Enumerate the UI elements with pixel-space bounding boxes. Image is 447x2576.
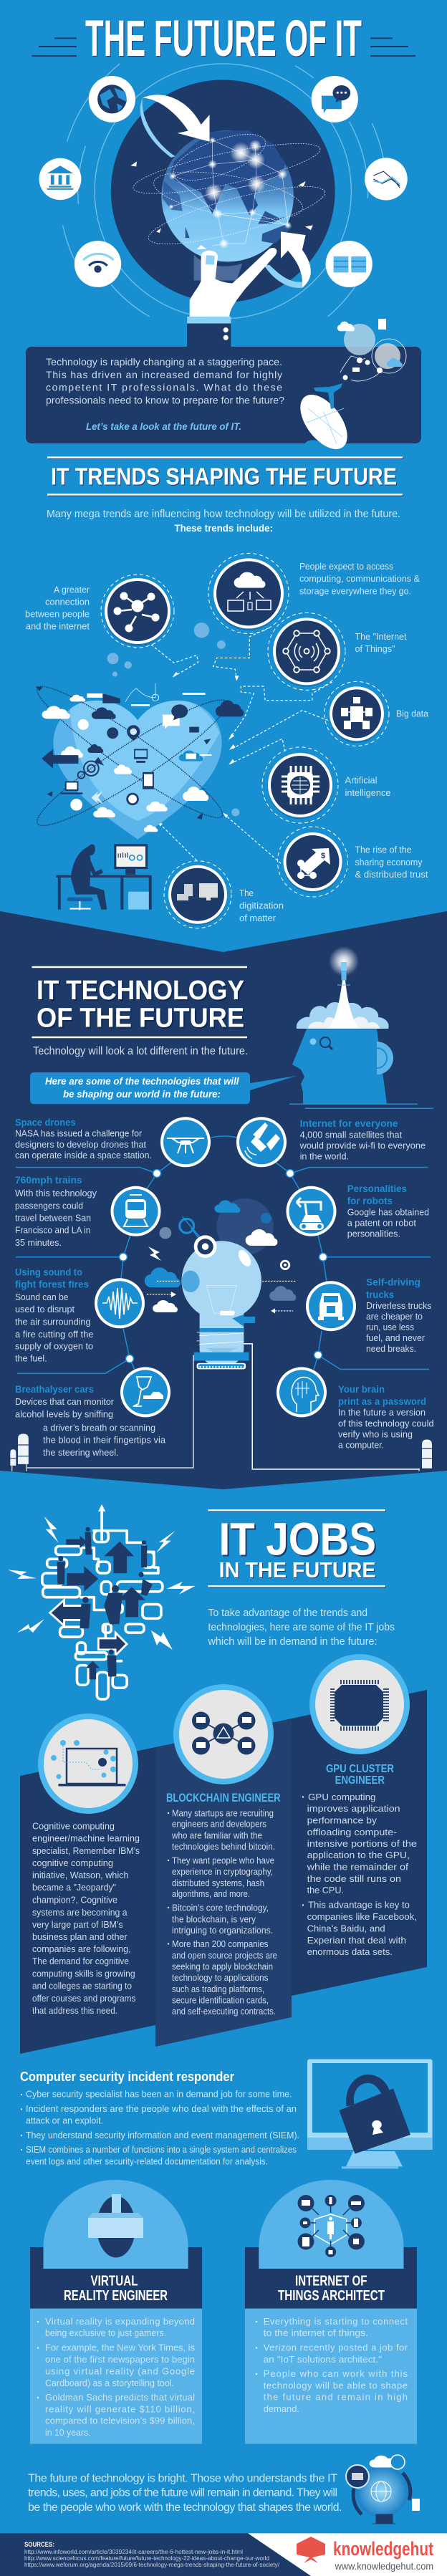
job: cognitive computing: that address this need. <box>32 2005 117 2016</box>
bulb base and wires <box>10 1332 432 1471</box>
job: blockchain engineer: and open source projects are <box>172 1950 277 1961</box>
job: gpu cluster engineer: improves application <box>307 1803 400 1814</box>
icon: satellite <box>236 1117 287 1167</box>
section 2 intro <box>47 508 400 534</box>
curved arrows <box>140 95 311 288</box>
intro text: competent IT professionals. What do these <box>46 382 282 393</box>
job: cognitive computing: companies are following, <box>32 1943 131 1954</box>
technology: self-driving trucks: need breaks. <box>366 1343 416 1354</box>
trend: sharing economy label: & distributed trust <box>355 869 428 880</box>
illustration: head with rocket <box>289 946 433 1108</box>
job: cognitive computing: champion?, Cognitive <box>32 1895 117 1905</box>
technology: breathalyser cars: a driver’s breath or scanning <box>43 1423 155 1433</box>
section 2 heading <box>47 458 403 494</box>
section 3 subtitle: Technology will look a lot different in the future. <box>33 1045 248 1057</box>
trend: digitization circle <box>164 861 231 928</box>
job: gpu cluster engineer: the CPU. <box>307 1885 344 1895</box>
navy clouds and icons <box>42 693 244 805</box>
technology: breathalyser cars: the blood in their fingertips via <box>43 1435 166 1446</box>
job: gpu cluster engineer: Experian that deal with <box>307 1935 406 1946</box>
card: virtual reality engineer <box>30 2180 202 2444</box>
technology: 760mph trains: 760mph trains <box>15 1174 82 1186</box>
icon: chat <box>312 76 358 122</box>
technology: personalities for robots <box>347 1183 429 1239</box>
white clouds <box>42 693 208 832</box>
job: cognitive computing: and colleges ae starting to <box>32 1981 132 1991</box>
card: virtual reality engineer: Goldman Sachs predicts that virtual <box>45 2392 195 2403</box>
job: blockchain engineer: distributed systems, hash <box>172 1878 264 1888</box>
job: gpu cluster engineer: intensive portions of the <box>307 1838 417 1849</box>
footer: logo area <box>248 2533 447 2576</box>
section 3 heading: OF THE FUTURE <box>37 1004 244 1034</box>
trend: sharing economy label: The rise of the <box>355 845 411 855</box>
job: computer security incident responder: event logs and other security-related documentation for analysis. <box>26 2156 268 2167</box>
illustration: maze with people and arrows <box>8 1504 196 1699</box>
speech bubble <box>30 1072 297 1104</box>
job: cognitive computing: specialist, Remember IBM’s <box>32 1845 140 1856</box>
job: cognitive computing: computing skills is growing <box>32 1969 135 1979</box>
technology: brain print password: verify who is using <box>338 1428 413 1439</box>
hero illustration: hand holding globe <box>39 64 408 349</box>
connector nodes <box>119 1169 327 1363</box>
trend: big data label: Big data <box>396 708 429 719</box>
technology: using sound to fight forest fires: Using sound to <box>15 1267 82 1278</box>
trend: digitization label: The <box>239 888 254 898</box>
card: virtual reality engineer: REALITY ENGINEER <box>64 2288 168 2304</box>
closing statement: The future of technology is bright. Those who understands the IT <box>28 2473 337 2484</box>
job: cognitive computing <box>32 1821 140 2016</box>
job: gpu cluster engineer: the code still runs on <box>307 1873 401 1884</box>
logo mark <box>297 2537 325 2563</box>
footer: sources <box>0 2533 311 2576</box>
section 4 intro: To take advantage of the trends and <box>208 1607 367 1619</box>
card: internet of things architect: an "IoT solutions architect." <box>264 2354 382 2365</box>
icon: drone <box>160 1117 211 1167</box>
job: blockchain engineer: experience in cryptography, <box>172 1866 273 1877</box>
technology: internet for everyone: 4,000 small satellites that <box>300 1129 402 1140</box>
card: virtual reality engineer: reality will generate $110 billion, <box>45 2403 195 2414</box>
technology: breathalyser cars <box>15 1383 166 1458</box>
technology: self-driving trucks: Self-driving <box>366 1276 420 1287</box>
job: gpu cluster engineer: China’s Baidu, and <box>307 1923 385 1933</box>
technology: self-driving trucks: run, use less <box>366 1322 414 1332</box>
globe <box>161 130 294 261</box>
technology: breathalyser cars: Breathalyser cars <box>15 1383 94 1395</box>
job: gpu cluster engineer: while the remainder of <box>306 1862 408 1873</box>
card: virtual reality engineer: being exclusive to just gamers. <box>45 2327 166 2338</box>
technology: brain print password: Your brain <box>338 1383 385 1395</box>
illustration: satellite dish and technology icons <box>291 319 406 458</box>
panel: job cards background <box>20 1690 427 2054</box>
technology: personalities for robots: for robots <box>347 1195 393 1206</box>
job: computer security incident responder: Computer security incident responder <box>20 2070 234 2084</box>
card: internet of things architect: Verizon recently posted a job for <box>264 2342 408 2352</box>
technology: internet for everyone: would provide wi-fi to everyone <box>299 1140 426 1150</box>
card: internet of things architect: INTERNET OF <box>295 2274 367 2289</box>
job: blockchain engineer: technologies behind bitcoin. <box>172 1841 275 1852</box>
technology: personalities for robots: personalities. <box>347 1228 400 1239</box>
card: internet of things architect: THINGS ARCHITECT <box>278 2288 385 2304</box>
card: internet of things architect <box>245 2180 417 2444</box>
panel: introduction <box>26 319 421 458</box>
shadow under globe <box>194 255 242 280</box>
trend: internet of things circle <box>268 612 345 690</box>
technology: using sound to fight forest fires: the fuel. <box>15 1353 47 1364</box>
trend: connection label: and the internet <box>26 621 90 632</box>
icon: train <box>110 1186 160 1236</box>
section 4 heading <box>208 1510 385 1586</box>
card: internet of things architect: People who can work with this <box>264 2368 408 2379</box>
job: cognitive computing: The demand for cognitive <box>32 1956 129 1966</box>
icon: bank <box>39 158 81 200</box>
connector lines between technologies <box>16 1136 431 1373</box>
job: blockchain engineer: the blockchain, is very <box>172 1914 256 1924</box>
technology: internet for everyone: in the world. <box>300 1150 349 1161</box>
technology: 760mph trains: travel between San <box>15 1213 91 1224</box>
trend: connection label: A greater <box>54 585 90 595</box>
orbit lines <box>130 125 330 255</box>
section 4 heading: IN THE FUTURE <box>219 1557 376 1582</box>
footer: logo area: www.knowledgehut.com <box>335 2560 433 2572</box>
trend: sharing economy label: sharing economy <box>355 857 423 868</box>
intro text <box>46 356 284 405</box>
technology: internet for everyone: Internet for everyone <box>300 1118 398 1129</box>
icon: line chart <box>365 158 408 201</box>
trend: sharing economy label <box>355 845 428 880</box>
trend: cloud label: computing, communications & <box>299 573 420 584</box>
job: gpu cluster engineer: GPU CLUSTER <box>326 1763 394 1775</box>
trend: digitization label: of matter <box>239 913 277 923</box>
speech bubble: Here are some of the technologies that will <box>45 1075 240 1087</box>
technology: 760mph trains: Francisco and LA in <box>15 1225 90 1236</box>
job: computer security incident responder: Incident responders are the people who deal with the effects of an <box>26 2103 297 2114</box>
trend: digitization label: digitization <box>239 900 284 911</box>
card: virtual reality engineer: For example, the New York Times, is <box>45 2342 195 2352</box>
card: internet of things architect: to the internet of things. <box>264 2327 368 2338</box>
job: blockchain engineer: intriguing to organizations. <box>172 1925 273 1936</box>
job: blockchain engineer: They want people who have <box>172 1855 274 1865</box>
technology: space drones: can operate inside a space station. <box>15 1150 152 1160</box>
trend: digitization label <box>239 888 284 923</box>
job: blockchain engineer: More than 200 companies <box>172 1938 269 1949</box>
technology: brain print password: a computer. <box>338 1439 384 1450</box>
section 2 intro: These trends include: <box>175 522 273 534</box>
card: virtual reality engineer: one of the first newspapers to begin <box>45 2354 195 2365</box>
trend: connection label: between people <box>25 609 90 620</box>
footer: sources: https://www.weforum.org/agenda/2015/09/6-technology-mega-trends-shaping-the-future-of-society/ <box>24 2562 280 2568</box>
trend: artificial intelligence label <box>345 775 391 798</box>
job: computer security incident responder <box>20 2070 299 2167</box>
job: blockchain engineer: algorithms, and more. <box>172 1888 250 1899</box>
technology: brain print password <box>338 1383 434 1450</box>
trend: internet of things label: of Things" <box>355 643 395 654</box>
closing statement <box>28 2473 342 2514</box>
section 3 heading <box>32 967 247 1037</box>
closing statement: trends, uses, and jobs of the future will remain in demand. They will <box>28 2487 337 2499</box>
technology: 760mph trains: With this technology <box>15 1188 97 1198</box>
heart <box>53 701 222 840</box>
technology: self-driving trucks: trucks <box>366 1289 394 1300</box>
job: blockchain engineer: engineers and developers <box>172 1819 266 1830</box>
job: cognitive computing: cognitive computing <box>32 1857 113 1868</box>
job: gpu cluster engineer: ENGINEER <box>335 1774 385 1787</box>
trend: cloud circle <box>208 553 289 633</box>
icon: iot person shield <box>298 2195 365 2257</box>
call to action: Let’s take a look at the future of IT. <box>86 420 241 432</box>
technology: self-driving trucks: Driverless trucks <box>366 1300 432 1311</box>
technology: breathalyser cars: the steering wheel. <box>43 1447 119 1458</box>
technology: personalities for robots: a patent on robot <box>347 1217 416 1228</box>
job: blockchain engineer: BLOCKCHAIN ENGINEER <box>166 1791 281 1804</box>
illustration: person at desk <box>56 844 152 910</box>
section 2 heading: IT TRENDS SHAPING THE FUTURE <box>51 463 397 490</box>
job: cognitive computing: offer courses and programs <box>32 1993 136 2004</box>
navy section background <box>0 911 447 1489</box>
icon: tanks <box>10 1434 432 1469</box>
icon: breathalyser glass and car <box>120 1367 170 1417</box>
trend: artificial intelligence label: intelligence <box>345 787 391 798</box>
people <box>57 1527 153 1676</box>
icon: wifi <box>74 241 121 287</box>
top-line decoration <box>125 683 155 702</box>
trend: connection label <box>25 585 90 632</box>
icon: vr headset <box>88 2194 143 2258</box>
job: gpu cluster engineer: application to the GPU, <box>307 1850 410 1860</box>
illustration: heart of connected devices <box>27 674 244 910</box>
job: computer security incident responder: attack or an exploit. <box>26 2115 103 2125</box>
trend: sharing economy circle: $ <box>321 852 325 860</box>
technology: personalities for robots: Personalities <box>347 1183 407 1194</box>
card: virtual reality engineer: using virtual reality (and Google <box>45 2365 195 2377</box>
job: blockchain engineer: secure identification cards, <box>172 1995 269 2006</box>
technology: personalities for robots: Google has obtained <box>347 1207 429 1218</box>
card: virtual reality engineer: VIRTUAL <box>90 2274 138 2289</box>
card: internet of things architect: the future and remain in high <box>264 2392 408 2403</box>
job: gpu cluster engineer <box>302 1763 417 1957</box>
technology: 760mph trains: 35 minutes. <box>15 1237 62 1248</box>
technology: brain print password: In the future a version <box>338 1407 426 1418</box>
technology: using sound to fight forest fires <box>15 1267 93 1364</box>
section 2 intro: Many mega trends are influencing how technology will be utilized in the future. <box>47 508 400 520</box>
icon: truck <box>306 1281 356 1331</box>
technology: space drones: designers to develop drones that <box>15 1139 146 1150</box>
job: blockchain engineer: seeking to apply blockchain <box>172 1961 273 1971</box>
job: blockchain engineer: and self-executing contracts. <box>172 2006 276 2017</box>
section 3 heading: IT TECHNOLOGY <box>37 976 244 1006</box>
trend: cloud label: People expect to access <box>299 561 393 572</box>
footer: sources: http://www.sciencefocus.com/feature/future/future-technology-22-ideas-about-change-our-world <box>24 2555 269 2562</box>
technology: 760mph trains: passengers could <box>15 1201 83 1211</box>
job: blockchain engineer: such as trading platforms, <box>172 1984 264 1994</box>
job: gpu cluster engineer: enormous data sets. <box>307 1946 393 1957</box>
trend: internet of things label <box>355 631 407 654</box>
card: internet of things architect: technology will be able to shape <box>264 2380 408 2390</box>
job: cognitive computing: systems are becoming a <box>32 1907 128 1918</box>
closing statement: be the people who work with the technology that shapes the world. <box>28 2501 342 2514</box>
icon: cognitive computing <box>38 1714 138 1814</box>
job: gpu cluster engineer: offloading compute- <box>307 1827 397 1837</box>
icon: robot <box>287 1186 337 1236</box>
section 4 intro: technologies, here are some of the IT jobs <box>208 1621 395 1633</box>
illustration: light bulb <box>145 1198 297 1364</box>
job: blockchain engineer: Many startups are recruiting <box>172 1807 274 1818</box>
job: blockchain engineer: who are familiar with the <box>171 1830 262 1840</box>
card: internet of things architect: demand. <box>264 2403 299 2414</box>
technology: self-driving trucks: fuel, and never <box>366 1332 426 1343</box>
speech bubble: be shaping our world in the future: <box>63 1088 221 1100</box>
icon: brain print head <box>277 1367 327 1417</box>
technology: brain print password: of this technology could <box>338 1418 434 1428</box>
technology: using sound to fight forest fires: Sound can be <box>15 1292 69 1302</box>
trend: cloud label <box>299 561 420 597</box>
intro text: Technology is rapidly changing at a staggering pace. <box>46 356 282 367</box>
job: blockchain engineer: technology to applications <box>172 1972 269 1983</box>
section 4 intro <box>208 1607 395 1648</box>
job: gpu cluster engineer: performance by <box>307 1815 378 1825</box>
job: blockchain engineer: Bitcoin’s core technology, <box>172 1902 269 1913</box>
card: virtual reality engineer: compared to television’s $99 billion, <box>45 2416 195 2426</box>
card: virtual reality engineer: Virtual reality is expanding beyond <box>45 2316 195 2327</box>
connectors and bubbles <box>107 623 332 863</box>
trend: connection circle <box>101 575 174 648</box>
technology: 760mph trains <box>15 1174 97 1248</box>
icon: gpu chip <box>309 1654 410 1754</box>
job: cognitive computing: very large part of IBM’s <box>32 1919 123 1930</box>
illustration: monitor with padlock <box>307 2059 433 2168</box>
section 4 intro: which will be in demand in the future: <box>208 1635 377 1648</box>
technology: using sound to fight forest fires: fight forest fires <box>15 1278 89 1289</box>
icon: globe <box>89 76 135 122</box>
trend: cloud label: storage everywhere they go. <box>299 586 411 597</box>
technology: using sound to fight forest fires: the air surrounding <box>15 1316 90 1327</box>
job: cognitive computing: engineer/machine learning <box>32 1833 140 1844</box>
section 4 heading: IT JOBS <box>219 1513 376 1565</box>
orbit rings <box>27 674 236 839</box>
technology: breathalyser cars: Devices that can monitor <box>15 1396 115 1407</box>
technology: using sound to fight forest fires: supply of oxygen to <box>15 1341 93 1352</box>
trend: artificial intelligence circle <box>262 747 338 823</box>
technology: self-driving trucks <box>366 1276 432 1354</box>
technology: breathalyser cars: alcohol levels by sniffing <box>15 1409 113 1420</box>
hand <box>187 248 277 349</box>
job: cognitive computing: initiative, Watson, which <box>32 1870 129 1880</box>
footer: sources: SOURCES: <box>24 2541 54 2549</box>
technology: using sound to fight forest fires: used to disrupt <box>15 1304 74 1315</box>
job: gpu cluster engineer: GPU computing <box>308 1792 375 1802</box>
job: cognitive computing: business plan and other <box>32 1931 128 1942</box>
technology: space drones: Space drones <box>15 1116 76 1128</box>
technology: brain print password: print as a password <box>338 1395 426 1407</box>
intro text: professionals need to know to prepare for the future? <box>46 394 284 405</box>
card: internet of things architect: Everything is starting to connect <box>264 2316 408 2327</box>
technology: self-driving trucks: are cheaper to <box>366 1311 423 1322</box>
footer: sources: http://www.infoworld.com/article/3039234/it-careers/the-6-hottest-new-jobs-in-it.html <box>24 2549 243 2555</box>
job: cognitive computing: Cognitive computing <box>32 1821 115 1831</box>
job: gpu cluster engineer: companies like Facebook, <box>307 1911 417 1922</box>
icon: blockchain network <box>173 1684 274 1784</box>
card: virtual reality engineer: in 10 years. <box>45 2427 90 2438</box>
card: virtual reality engineer: Cardboard) as a storytelling tool. <box>45 2378 174 2388</box>
technology: space drones: NASA has issued a challenge for <box>15 1128 143 1138</box>
job: computer security incident responder: They understand security information and event management (SIEM). <box>26 2130 299 2140</box>
technology: internet for everyone <box>299 1118 426 1161</box>
icon: sound wave <box>95 1278 145 1328</box>
icon: database <box>326 241 372 287</box>
illustration: connected globe <box>346 2455 420 2524</box>
job: computer security incident responder: Cyber security specialist has been an in demand job for some time. <box>26 2089 292 2100</box>
job: blockchain engineer <box>166 1791 281 2017</box>
trend: sharing economy circle <box>278 827 348 897</box>
trend: internet of things label: The "Internet <box>355 631 407 642</box>
job: gpu cluster engineer: This advantage is key to <box>308 1900 410 1910</box>
job: computer security incident responder: SIEM combines a number of functions into a single system and centralizes <box>26 2144 297 2155</box>
trend: big data circle <box>325 681 389 746</box>
trend: connection label: connection <box>45 597 90 607</box>
technology: space drones <box>15 1116 152 1160</box>
technology: using sound to fight forest fires: a fire cutting off the <box>15 1329 93 1340</box>
trend: artificial intelligence label: Artificial <box>345 775 378 786</box>
intro text: This has driven an increased demand for highly <box>46 369 282 380</box>
dark disc <box>111 80 335 302</box>
job: cognitive computing: became a "Jeopardy" <box>32 1882 116 1893</box>
